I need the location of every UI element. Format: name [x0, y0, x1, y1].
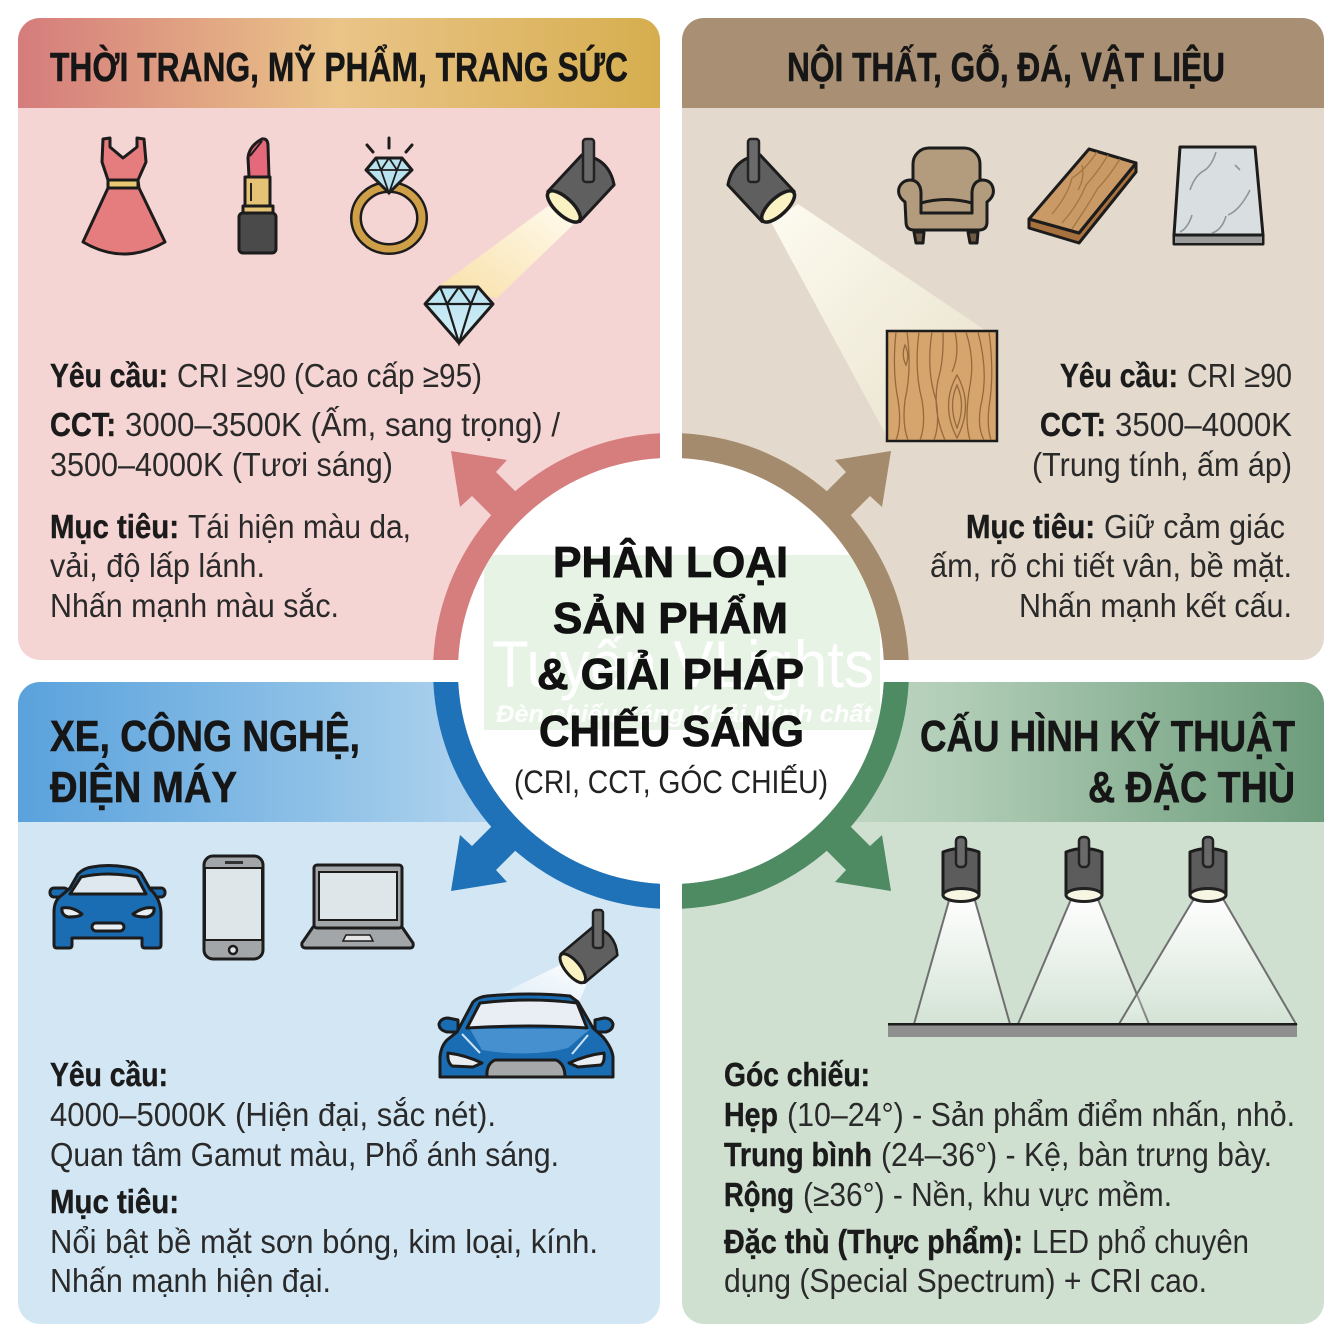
text: furniture requirements: CCT:	[1040, 406, 1106, 443]
text: beam angles: (24–36°) - Kệ, bàn trưng bày.	[881, 1136, 1272, 1173]
text: cars goals	[50, 1183, 598, 1299]
ring segment and arrow: cars	[433, 682, 660, 909]
text: beam angles: Góc chiếu:	[724, 1056, 870, 1093]
text: cars requirements: Quan tâm Gamut màu, Phổ ánh sáng.	[50, 1136, 559, 1173]
heading: furniture: NỘI THẤT, GỖ, ĐÁ, VẬT LIỆU	[787, 44, 1225, 90]
icon: track light	[542, 139, 620, 228]
centre title: SẢN PHẨM	[553, 592, 788, 643]
centre title	[514, 537, 828, 800]
text: fashion requirements: Yêu cầu:	[50, 357, 168, 394]
icon: smartphone	[204, 856, 263, 959]
heading: cars: ĐIỆN MÁY	[50, 762, 237, 812]
watermark	[484, 555, 880, 730]
text: fashion goals: vải, độ lấp lánh.	[50, 547, 265, 584]
text: fashion requirements	[50, 357, 561, 483]
centre title: PHÂN LOẠI	[553, 537, 788, 587]
text: furniture goals	[930, 508, 1292, 624]
text: beam angles: (≥36°) - Nền, khu vực mềm.	[803, 1176, 1172, 1213]
icon: wooden plank	[1029, 149, 1136, 243]
watermark: Tuyến VLights	[492, 627, 874, 701]
icon: stone slab	[1174, 147, 1263, 244]
beam: wide	[1119, 897, 1296, 1024]
lamp: narrow	[943, 837, 979, 902]
centre title: CHIẾU SÁNG	[539, 706, 804, 756]
icon: lipstick	[239, 139, 276, 253]
text: special food lighting: dụng (Special Spectrum) + CRI cao.	[724, 1262, 1207, 1299]
lamp: medium	[1066, 837, 1102, 902]
panel: cars, technology, electronics	[18, 682, 660, 1324]
beam: narrow	[914, 897, 1010, 1024]
lamp: wide	[1190, 837, 1226, 902]
panel: technical configuration	[682, 682, 1324, 1324]
beam: medium	[1018, 897, 1149, 1024]
floor	[888, 1023, 1297, 1037]
light beam: cars	[493, 965, 587, 1005]
text: furniture goals: ấm, rõ chi tiết vân, bề mặt.	[930, 547, 1292, 584]
text: cars requirements: Yêu cầu:	[50, 1056, 168, 1093]
centre subtitle: (CRI, CCT, GÓC CHIẾU)	[514, 764, 828, 800]
icon: armchair	[899, 148, 993, 243]
icon: track light	[555, 910, 623, 987]
text: cars goals: Nhấn mạnh hiện đại.	[50, 1262, 331, 1299]
icon: laptop	[302, 865, 413, 948]
text: beam angles: (10–24°) - Sản phẩm điểm nhấn, nhỏ.	[787, 1096, 1295, 1133]
panel: furniture, wood, stone, materials	[682, 18, 1324, 660]
text: cars goals: Nổi bật bề mặt sơn bóng, kim loại, kính.	[50, 1223, 598, 1260]
text: fashion requirements: 3000–3500K (Ấm, sang trọng) /	[125, 406, 561, 443]
header band: fashion	[18, 18, 660, 108]
text: fashion requirements: CCT:	[50, 406, 116, 443]
heading: cars	[50, 710, 360, 812]
heading: cars: XE, CÔNG NGHỆ,	[50, 710, 360, 761]
text: fashion goals: Tái hiện màu da,	[188, 508, 411, 545]
panel: fashion, cosmetics, jewellery	[18, 18, 660, 660]
text: furniture requirements: 3500–4000K	[1115, 406, 1292, 443]
text: fashion goals: Mục tiêu:	[50, 508, 179, 545]
ring segment and arrow: fashion	[433, 433, 660, 660]
header band: furniture	[682, 18, 1324, 108]
centre circle	[458, 458, 884, 884]
text: furniture requirements: CRI ≥90	[1187, 357, 1292, 394]
text: fashion requirements: 3500–4000K (Tươi sáng)	[50, 446, 393, 483]
text: special food lighting: Đặc thù (Thực phẩm):	[724, 1223, 1023, 1260]
light beam: fashion	[438, 206, 574, 298]
icon: diamond	[425, 287, 493, 343]
text: furniture goals: Giữ cảm giác	[1104, 508, 1285, 545]
text: fashion goals: Nhấn mạnh màu sắc.	[50, 587, 339, 624]
text: cars goals: Mục tiêu:	[50, 1183, 179, 1220]
icon: car front	[50, 866, 165, 948]
text: furniture requirements: (Trung tính, ấm áp)	[1032, 446, 1292, 483]
header band: cars	[18, 682, 660, 822]
centre title: & GIẢI PHÁP	[537, 649, 804, 699]
text: fashion goals	[50, 508, 411, 624]
text: special food lighting	[724, 1223, 1249, 1299]
ring segment and arrow: furniture	[682, 433, 909, 660]
heading: technical	[920, 711, 1295, 812]
heading: technical: & ĐẶC THÙ	[1088, 762, 1295, 812]
icon: sports car	[439, 994, 613, 1077]
text: beam angles: Trung bình	[724, 1136, 872, 1173]
text: fashion requirements: CRI ≥90 (Cao cấp ≥95)	[177, 357, 482, 394]
light beam: furniture	[771, 204, 985, 435]
diagram: beam angles	[888, 837, 1297, 1037]
header band: technical	[682, 682, 1324, 822]
icon: diamond ring	[356, 138, 422, 249]
icon: dress	[83, 138, 165, 254]
text: furniture goals: Mục tiêu:	[966, 508, 1095, 545]
text: beam angles: Rộng	[724, 1176, 794, 1213]
heading: fashion: THỜI TRANG, MỸ PHẨM, TRANG SỨC	[50, 43, 628, 90]
text: furniture requirements: Yêu cầu:	[1060, 357, 1178, 394]
text: cars requirements	[50, 1056, 559, 1173]
text: furniture requirements	[1032, 357, 1292, 483]
text: cars requirements: 4000–5000K (Hiện đại, sắc nét).	[50, 1096, 496, 1133]
icon: wood sample	[887, 331, 997, 441]
text: special food lighting: LED phổ chuyên	[1032, 1223, 1249, 1260]
watermark: Đèn chiếu sáng Khải Minh chất	[496, 701, 873, 728]
text: beam angles	[724, 1056, 1295, 1213]
text: beam angles: Hẹp	[724, 1096, 778, 1133]
text: furniture goals: Nhấn mạnh kết cấu.	[1019, 587, 1292, 624]
ring segment and arrow: technical	[682, 682, 909, 909]
icon: track light	[722, 139, 800, 228]
